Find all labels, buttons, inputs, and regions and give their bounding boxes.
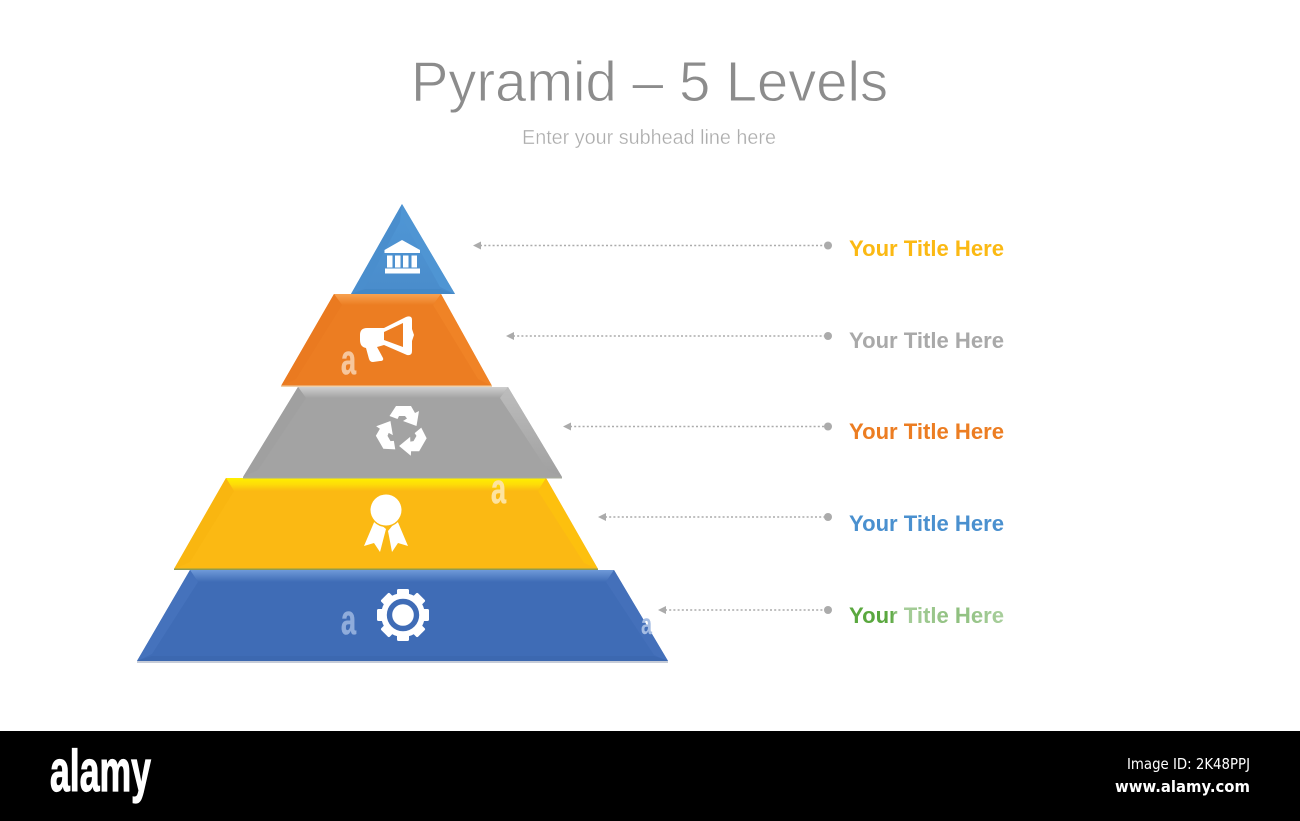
icon: ribbon (364, 493, 408, 552)
label: level 5 title: Your Title Here (849, 603, 1004, 628)
watermark a: a (341, 336, 356, 383)
watermark a edge: a (641, 608, 652, 641)
connector arrow: level 4 (598, 513, 832, 521)
title: Pyramid – 5 Levels (411, 50, 888, 114)
connector arrow: level 1 (473, 242, 832, 250)
level 5: blue base (137, 570, 668, 663)
icon: gear (377, 589, 429, 641)
connector arrow: level 5 (658, 606, 832, 614)
footer logo: alamy (50, 739, 151, 804)
icon: bank (384, 240, 420, 274)
icon: megaphone (360, 316, 414, 362)
website: www.alamy.com (1115, 777, 1250, 796)
label: level 3 title: Your Title Here (849, 419, 1004, 444)
connector arrow: level 3 (563, 422, 832, 430)
level 2: orange (281, 294, 492, 387)
footer bar (0, 731, 1300, 821)
icon: recycle (372, 406, 430, 458)
level 4: yellow (174, 465, 598, 570)
watermark a: a (341, 596, 356, 643)
label: level 1 title: Your Title Here (849, 236, 1004, 261)
label: level 4 title: Your Title Here (849, 511, 1004, 536)
level 1: blue apex (351, 204, 455, 294)
label: level 2 title: Your Title Here (849, 328, 1004, 353)
image id: Image ID: 2K48PPJ (1127, 755, 1250, 773)
subhead: Enter your subhead line here (522, 127, 776, 149)
watermark a: a (491, 465, 506, 512)
connector arrow: level 2 (506, 332, 832, 340)
level 3: grey (243, 387, 562, 478)
pyramid (137, 204, 668, 663)
